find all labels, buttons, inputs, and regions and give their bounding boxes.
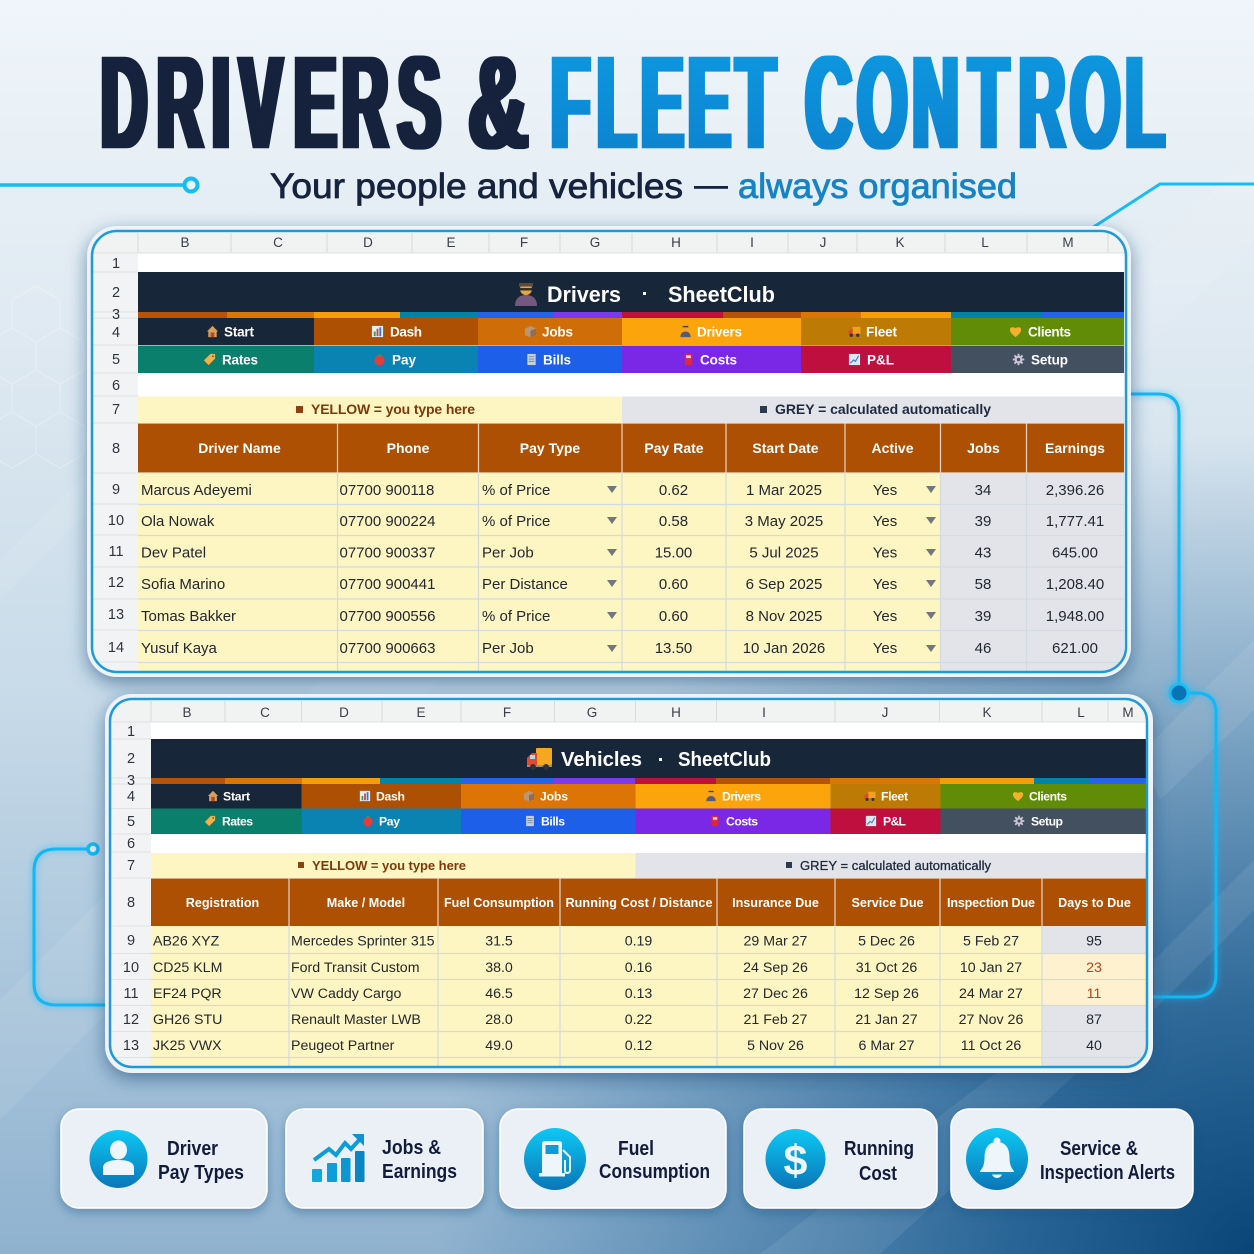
row numbers: 13 — [108, 607, 124, 623]
feature card: service alerts: Inspection Alerts — [1040, 1162, 1175, 1184]
colour stripe — [151, 778, 1146, 784]
table header: Insurance Due — [732, 896, 819, 910]
table body: Peugeot Partner — [291, 1038, 395, 1054]
table body: CD25 KLM — [153, 960, 222, 976]
table body: 5 Jul 2025 — [749, 544, 819, 562]
table body: 39 — [975, 513, 991, 530]
table body: 0.13 — [625, 986, 652, 1002]
table body: 27 Nov 26 — [959, 1012, 1023, 1028]
navigation row 2: Setup — [1031, 814, 1063, 828]
navigation row 2 — [151, 808, 1146, 834]
table body: Yes — [873, 576, 897, 593]
table header: Phone — [387, 440, 430, 456]
legend bar: YELLOW = you type here — [312, 858, 466, 873]
navigation row 2: Pay — [392, 352, 416, 368]
column letters: B — [182, 705, 192, 720]
connector: left side — [34, 844, 105, 1005]
feature card: jobs and earnings: Earnings — [382, 1161, 457, 1183]
column letters: J — [820, 235, 826, 250]
row numbers: 5 — [112, 352, 120, 368]
table body: AB26 XYZ — [153, 934, 220, 950]
table body: 07700 900118 — [340, 482, 434, 499]
table body — [151, 926, 1146, 1066]
navigation row 1: Fleet — [866, 324, 898, 340]
table body: Yes — [873, 482, 897, 499]
row numbers: 12 — [108, 575, 124, 591]
navigation row 2: P&L — [867, 352, 894, 368]
table body: 21 Feb 27 — [744, 1012, 808, 1028]
table body: 0.12 — [625, 1038, 652, 1054]
sheet banner: SheetClub — [668, 282, 775, 307]
column letters: C — [260, 705, 270, 720]
navigation row 2: Costs — [726, 814, 758, 828]
column letters: J — [882, 705, 888, 720]
navigation row 2: Rates — [222, 814, 253, 828]
column letters: L — [1077, 705, 1085, 720]
row numbers: 3 — [112, 307, 120, 323]
table body: Yusuf Kaya — [141, 640, 218, 657]
table body: 27 Dec 26 — [743, 986, 808, 1002]
feature card: fuel consumption — [500, 1109, 726, 1208]
table header: Jobs — [967, 440, 1000, 456]
table header: Earnings — [1045, 440, 1105, 456]
table body: Dev Patel — [141, 544, 206, 562]
feature card: jobs and earnings: Jobs & — [382, 1137, 441, 1159]
table body: 0.62 — [659, 482, 688, 499]
table header: Start Date — [752, 440, 819, 456]
table body: 11 Oct 26 — [961, 1038, 1021, 1054]
feature card: running cost — [744, 1109, 937, 1208]
feature card: fuel consumption: Fuel — [618, 1138, 654, 1160]
column letters — [182, 238, 1072, 247]
navigation row 1: Clients — [1028, 324, 1071, 340]
table body: 1 Mar 2025 — [746, 482, 822, 499]
column letters: C — [273, 235, 283, 250]
table header: Driver Name — [198, 440, 281, 456]
column letters: G — [587, 705, 597, 720]
table body: 58 — [975, 576, 991, 593]
table body: Per Job — [482, 640, 534, 657]
table body: 0.60 — [659, 576, 688, 593]
table header: Pay Rate — [644, 440, 704, 456]
navigation row 1 — [151, 784, 1146, 808]
table body: 46.5 — [485, 986, 513, 1002]
table body: 49.0 — [485, 1038, 513, 1054]
table body: 1,777.41 — [1046, 513, 1104, 530]
navigation row 1 — [138, 318, 1124, 345]
table body: Yes — [873, 640, 897, 657]
navigation row 1: Drivers — [697, 324, 742, 340]
column letters: F — [503, 705, 511, 720]
column letters: F — [520, 235, 528, 250]
legend bar — [151, 853, 1146, 878]
row numbers: 10 — [108, 513, 124, 529]
sheet banner — [138, 272, 1124, 312]
column letters: M — [1062, 235, 1074, 250]
table body: 07700 900337 — [340, 544, 435, 562]
table body: Tomas Bakker — [141, 608, 236, 625]
table header: Pay Type — [520, 440, 580, 456]
row numbers: 4 — [112, 325, 120, 341]
legend bar: GREY = calculated automatically — [775, 401, 991, 417]
column letters: D — [363, 235, 373, 250]
table body: 40 — [1086, 1038, 1102, 1054]
table body: Ola Nowak — [141, 513, 215, 530]
navigation row 2: Setup — [1031, 352, 1068, 368]
column letters: K — [982, 705, 992, 720]
column letters: B — [180, 235, 190, 250]
table body: 12 Sep 26 — [854, 986, 919, 1002]
column letters: L — [981, 235, 989, 250]
legend bar: GREY = calculated automatically — [800, 858, 992, 873]
table body: % of Price — [482, 513, 550, 530]
table body: 31.5 — [485, 934, 513, 950]
row numbers: 4 — [127, 789, 135, 805]
row numbers: 6 — [127, 836, 135, 852]
column letters: E — [446, 235, 456, 250]
row numbers: 8 — [127, 895, 135, 911]
navigation row 2: Costs — [700, 352, 737, 368]
feature card: service alerts — [951, 1109, 1193, 1208]
row numbers: 6 — [112, 378, 120, 394]
row numbers: 2 — [112, 285, 120, 301]
feature card: service alerts: Service & — [1060, 1138, 1138, 1160]
row numbers: 10 — [123, 960, 139, 976]
feature card: driver pay types: Driver — [167, 1138, 218, 1160]
table body: 46 — [975, 640, 991, 657]
row numbers: 9 — [112, 482, 120, 498]
navigation row 2: P&L — [883, 814, 907, 828]
title: CONTROL — [806, 30, 1164, 178]
table body: 1,208.40 — [1046, 576, 1104, 593]
table body: EF24 PQR — [153, 986, 222, 1002]
table body: 21 Jan 27 — [855, 1012, 918, 1028]
table body: Yes — [873, 513, 897, 530]
column letters: M — [1122, 705, 1134, 720]
table body: 87 — [1086, 1012, 1102, 1028]
sheet banner: Drivers — [547, 282, 621, 307]
feature card: running cost: Cost — [859, 1163, 897, 1185]
navigation row 1: Dash — [390, 324, 422, 340]
table body: 621.00 — [1052, 640, 1098, 657]
table body: 29 Mar 27 — [744, 934, 808, 950]
table body: 38.0 — [485, 960, 513, 976]
table body: 07700 900556 — [340, 608, 435, 625]
row numbers: 2 — [127, 751, 135, 767]
column letters — [184, 708, 1132, 717]
row numbers: 1 — [127, 724, 135, 740]
navigation row 1: Dash — [376, 790, 405, 804]
table header: Days to Due — [1058, 896, 1131, 910]
table body: Sofia Marino — [141, 576, 225, 593]
subtitle: always organised — [738, 167, 1017, 206]
row numbers: 5 — [127, 814, 135, 830]
connector: top right — [1092, 184, 1254, 228]
table header: Active — [871, 440, 914, 456]
row numbers: 8 — [112, 441, 120, 457]
sheet banner: Vehicles — [561, 748, 642, 771]
row numbers: 11 — [108, 544, 124, 560]
table body: 07700 900663 — [340, 640, 435, 657]
table header: Service Due — [851, 896, 924, 910]
icon: rising bars — [312, 1134, 364, 1182]
column letters: E — [416, 705, 426, 720]
navigation row 1: Drivers — [722, 790, 761, 804]
table body: 2,396.26 — [1046, 482, 1104, 499]
table body: 07700 900441 — [340, 576, 435, 593]
table body: 8 Nov 2025 — [746, 608, 822, 625]
table body: 34 — [975, 482, 991, 499]
table body: 15.00 — [655, 544, 692, 562]
row numbers: 13 — [123, 1038, 139, 1054]
table body: 13.50 — [655, 640, 692, 657]
row numbers: 9 — [127, 933, 135, 949]
table body: 5 Nov 26 — [747, 1038, 804, 1054]
table body: 5 Dec 26 — [858, 934, 915, 950]
icon: bell — [966, 1128, 1028, 1190]
navigation row 1: Start — [224, 324, 254, 340]
table body: 28.0 — [485, 1012, 513, 1028]
table body: 31 Oct 26 — [856, 960, 917, 976]
table header: Make / Model — [327, 896, 405, 910]
column letters: K — [895, 235, 905, 250]
table body: Mercedes Sprinter 315 — [291, 934, 435, 950]
navigation row 2: Bills — [541, 814, 565, 828]
table header: Fuel Consumption — [444, 896, 554, 910]
table body: 645.00 — [1052, 544, 1098, 562]
navigation row 1: Jobs — [542, 324, 573, 340]
navigation row 1: Fleet — [881, 790, 908, 804]
table body: % of Price — [482, 608, 550, 625]
title: DRIVERS — [101, 30, 441, 178]
table body: 0.58 — [659, 513, 688, 530]
row numbers: 7 — [112, 402, 120, 418]
title: FLEET — [551, 30, 775, 178]
row numbers: 14 — [108, 640, 124, 656]
table body: Marcus Adeyemi — [141, 482, 252, 499]
table body: 1,948.00 — [1046, 608, 1104, 625]
table header: Inspection Due — [947, 896, 1035, 910]
table header — [151, 878, 1146, 926]
feature card: jobs and earnings — [286, 1109, 483, 1208]
table body — [138, 253, 1126, 672]
navigation row 2: Bills — [543, 352, 571, 368]
title: & — [468, 29, 528, 177]
icon: fuel pump — [524, 1128, 586, 1190]
row numbers: 1 — [112, 256, 120, 272]
table body: Per Job — [482, 544, 534, 562]
table body: Per Distance — [482, 576, 568, 593]
row numbers: 7 — [127, 858, 135, 874]
table body: 5 Feb 27 — [963, 934, 1019, 950]
feature card: driver pay types: Pay Types — [158, 1162, 244, 1184]
table body: 10 Jan 2026 — [743, 640, 825, 657]
feature card: driver pay types — [61, 1109, 267, 1208]
table body: 95 — [1086, 934, 1102, 950]
legend bar: YELLOW = you type here — [311, 401, 475, 417]
panel: vehicles sheet — [105, 694, 1153, 1073]
table body: JK25 VWX — [153, 1038, 222, 1054]
navigation row 2: Rates — [222, 352, 258, 368]
sheet banner: SheetClub — [678, 748, 771, 771]
connector: top left — [0, 178, 198, 192]
table body: 43 — [975, 544, 991, 562]
table body: GH26 STU — [153, 1012, 222, 1028]
navigation row 2 — [138, 346, 1124, 373]
table body: 6 Sep 2025 — [746, 576, 822, 593]
connector: node — [1165, 679, 1193, 707]
table body: Renault Master LWB — [291, 1012, 421, 1028]
panel: drivers sheet — [87, 226, 1131, 677]
colour stripe — [138, 312, 1124, 318]
table body: 23 — [1086, 960, 1102, 976]
title — [101, 29, 1164, 178]
table body: 10 Jan 27 — [960, 960, 1022, 976]
icon: truck — [527, 748, 552, 770]
table body: 11 — [1087, 986, 1101, 1002]
connector: right side glow — [1130, 394, 1216, 997]
column letters: I — [762, 705, 766, 720]
table body: % of Price — [482, 482, 550, 499]
icon: dollar: $ — [784, 1137, 808, 1185]
table body: 0.16 — [625, 960, 652, 976]
subtitle — [270, 167, 1017, 206]
column letters: I — [750, 235, 754, 250]
table body: 07700 900224 — [340, 513, 435, 530]
table body: 24 Mar 27 — [959, 986, 1023, 1002]
icon: dollar — [766, 1129, 826, 1189]
column letters: H — [671, 705, 681, 720]
table header — [138, 423, 1124, 473]
table header: Running Cost / Distance — [566, 896, 712, 910]
table body: 3 May 2025 — [745, 513, 823, 530]
column letters: D — [339, 705, 349, 720]
table body: 24 Sep 26 — [743, 960, 808, 976]
legend bar — [138, 396, 1124, 423]
table body: Yes — [873, 608, 897, 625]
table header: Registration — [186, 896, 259, 910]
icon: driver — [515, 283, 537, 306]
feature card: running cost: Running — [844, 1138, 914, 1160]
row numbers: 3 — [127, 773, 135, 789]
column letters: G — [590, 235, 600, 250]
row numbers: 11 — [123, 986, 139, 1002]
column letters: H — [671, 235, 681, 250]
navigation row 1: Start — [223, 790, 250, 804]
navigation row 1: Jobs — [540, 790, 568, 804]
row numbers — [108, 256, 124, 656]
table body: Yes — [873, 544, 897, 562]
table body: 6 Mar 27 — [858, 1038, 915, 1054]
table body: 0.19 — [625, 934, 652, 950]
table body: 0.22 — [625, 1012, 652, 1028]
table body: 39 — [975, 608, 991, 625]
sheet banner — [151, 739, 1146, 778]
feature card: fuel consumption: Consumption — [599, 1161, 710, 1183]
table body: Ford Transit Custom — [291, 960, 420, 976]
row numbers — [123, 724, 139, 1054]
table body: 0.60 — [659, 608, 688, 625]
navigation row 1: Clients — [1029, 790, 1067, 804]
icon: person — [90, 1130, 148, 1188]
subtitle: Your people and vehicles — [270, 167, 683, 206]
row numbers: 12 — [123, 1012, 139, 1028]
table body: VW Caddy Cargo — [291, 986, 401, 1002]
navigation row 2: Pay — [379, 814, 400, 828]
